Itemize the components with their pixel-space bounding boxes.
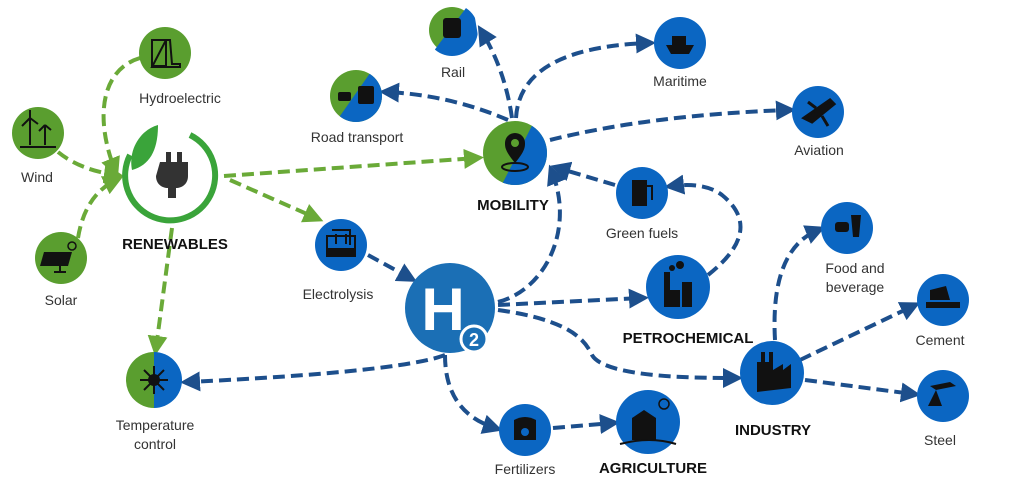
node: steel: Steel <box>924 432 956 448</box>
green arrows <box>58 58 476 348</box>
node: temperature control <box>116 352 195 452</box>
node: mobility: MOBILITY <box>477 197 549 214</box>
node: wind <box>12 107 64 185</box>
node: agriculture <box>599 390 707 477</box>
node: temperature control: Temperature <box>116 417 195 433</box>
node: aviation <box>792 86 844 158</box>
node: food and beverage: beverage <box>826 279 884 295</box>
node: petrochemical: PETROCHEMICAL <box>623 330 753 347</box>
node: rail <box>429 7 478 77</box>
node: road transport <box>312 70 404 145</box>
node: wind: Wind <box>21 169 53 185</box>
node: fertilizers: Fertilizers <box>495 461 555 477</box>
node: electrolysis <box>303 219 373 302</box>
node: food and beverage: Food and <box>825 260 885 276</box>
node: solar: Solar <box>45 292 78 308</box>
node: cement <box>915 274 969 348</box>
node: electrolysis: Electrolysis <box>303 286 373 302</box>
node: hydrogen H2: H <box>421 276 465 343</box>
node: hydroelectric <box>139 27 221 106</box>
node: food and beverage <box>821 202 885 295</box>
node: temperature control: control <box>134 436 176 452</box>
node: industry: INDUSTRY <box>735 422 811 439</box>
node: mobility <box>478 121 549 210</box>
node: cement: Cement <box>915 332 965 348</box>
node: hydrogen H2 <box>405 263 495 353</box>
node: solar <box>35 232 87 308</box>
node: industry <box>735 341 811 439</box>
node: green fuels: Green fuels <box>606 225 678 241</box>
blue arrows <box>188 32 913 428</box>
node: steel <box>917 370 969 448</box>
node: agriculture: AGRICULTURE <box>599 460 707 477</box>
node: hydrogen H2: 2 <box>469 330 479 350</box>
node: maritime: Maritime <box>653 73 707 89</box>
node: renewables: RENEWABLES <box>122 236 228 253</box>
node: rail: Rail <box>441 64 465 80</box>
node: road transport: Road transport <box>311 129 403 145</box>
node: hydroelectric: Hydroelectric <box>139 90 221 106</box>
node: green fuels <box>606 167 678 241</box>
node: aviation: Aviation <box>794 142 844 158</box>
node: fertilizers <box>495 404 555 477</box>
node: maritime <box>653 17 707 89</box>
node: renewables <box>122 125 228 253</box>
node: petrochemical <box>623 255 753 347</box>
